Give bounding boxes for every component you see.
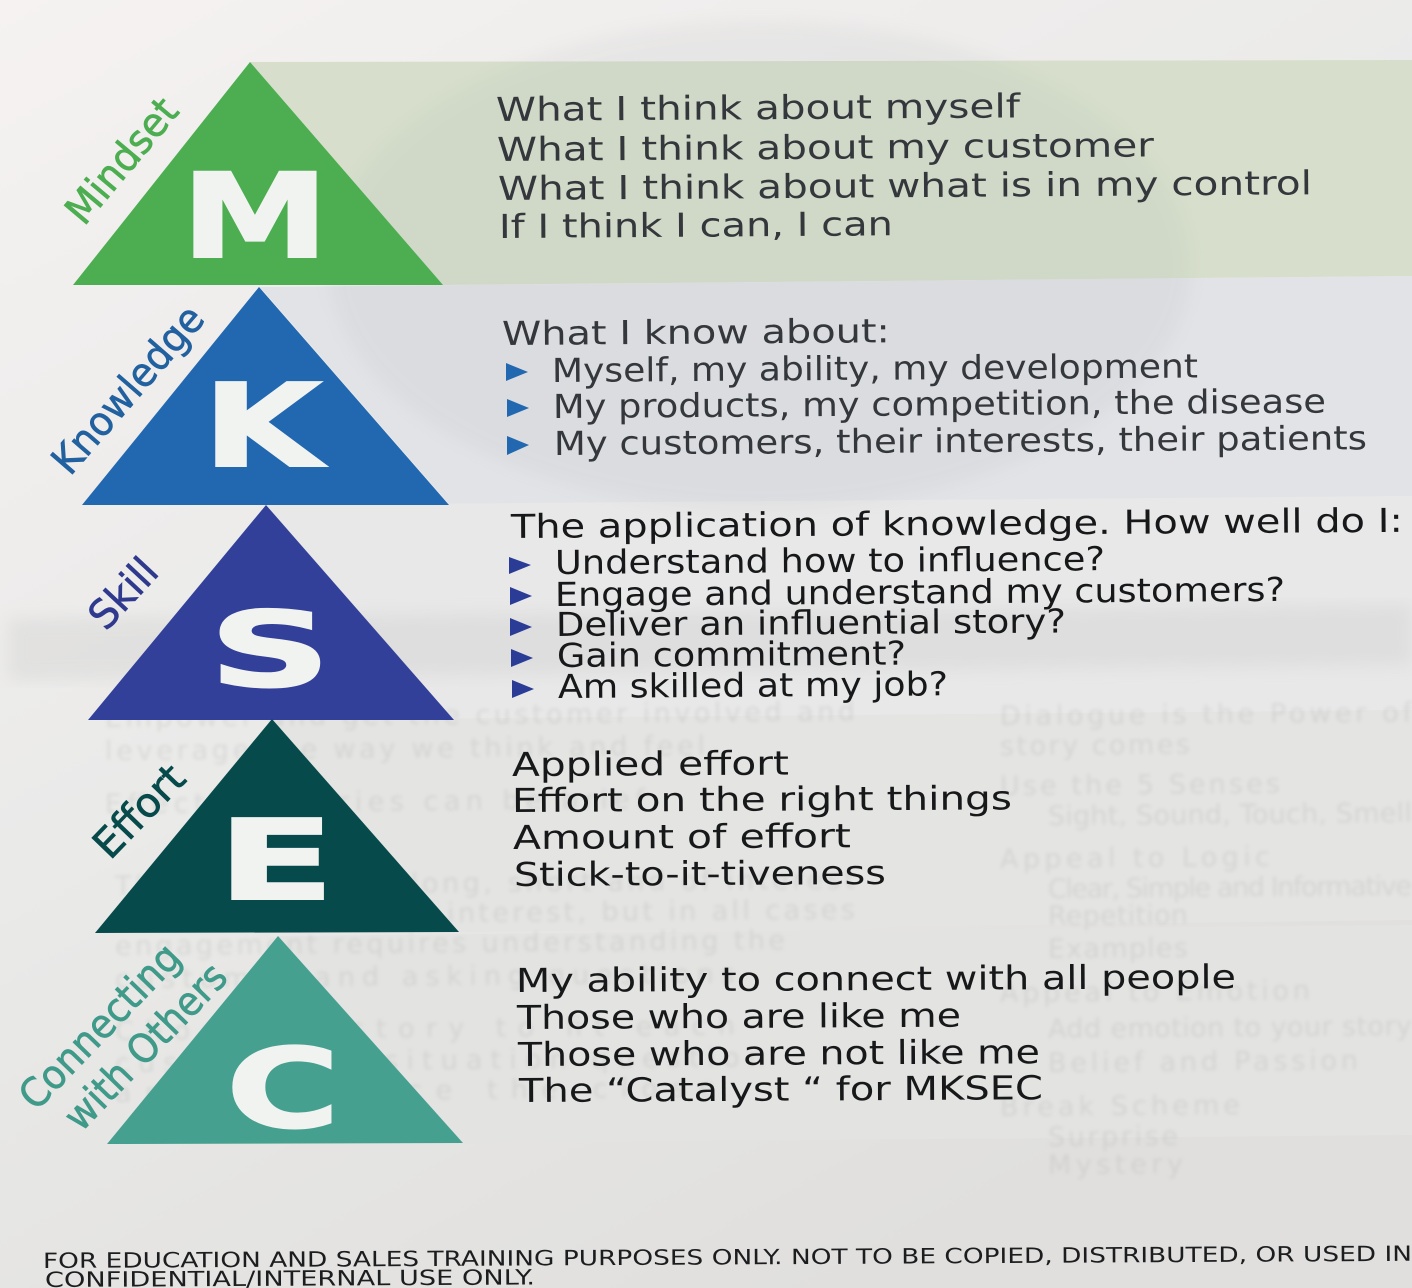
text: skill lines: Am skilled at my job?	[558, 664, 948, 706]
band: mindset background	[250, 60, 1412, 285]
show-through text: Surprise	[1048, 1121, 1178, 1153]
show-through text: Use the 5 Senses	[1000, 769, 1280, 802]
letter S: S	[209, 589, 331, 711]
show-through text: Appeal to Emotion	[1000, 975, 1310, 1009]
show-through text: The story can be long, short and of interest	[114, 865, 855, 902]
text: effort lines: Effort on the right things	[512, 778, 1012, 820]
show-through text: customer and asking questions	[115, 959, 735, 995]
label Skill: Skill	[80, 549, 168, 639]
text: skill lines: Engage and understand my customers?	[555, 570, 1285, 614]
text: mindset lines	[496, 86, 1312, 246]
show-through text: Belief and Passion	[1048, 1045, 1358, 1079]
text: skill lines: Understand how to influence?	[555, 539, 1105, 582]
show-through text: Add emotion to your story	[1048, 1011, 1412, 1045]
label Effort: Effort	[84, 755, 195, 868]
bullets	[509, 557, 534, 698]
text: knowledge lines	[502, 311, 1367, 463]
band: skill background	[265, 496, 1412, 720]
show-through text: customer or situation question	[115, 1042, 765, 1079]
text: effort lines: Stick-to-it-tiveness	[514, 853, 886, 894]
show-through text: Dialogue is the Power of	[1000, 697, 1412, 732]
show-through text: Effective stories can be brief	[105, 784, 647, 820]
label Connecting with Others: with Others	[55, 954, 237, 1140]
bullets	[506, 363, 529, 455]
panel: Effort	[84, 719, 1012, 933]
show-through text: and reinforce the close	[115, 1073, 715, 1109]
text: knowledge lines: Myself, my ability, my development	[552, 346, 1198, 390]
text: connecting lines: My ability to connect with all people	[516, 957, 1236, 1000]
panel: Skill	[80, 501, 1403, 720]
show-through text: Repetition	[1048, 900, 1188, 932]
text: knowledge lines: My products, my competition, the disease	[553, 382, 1326, 426]
text: skill lines: The application of knowledge. How well do I:	[510, 501, 1403, 546]
triangle S	[88, 505, 454, 720]
text: effort lines: Applied effort	[512, 744, 789, 784]
show-through text: engagement requires understanding the	[115, 925, 785, 962]
band: effort background	[272, 710, 1412, 932]
show-through text: Examples	[1048, 933, 1188, 965]
show-through text: Sight, Sound, Touch, Smell	[1048, 798, 1412, 832]
show-through text: story comes	[1000, 729, 1190, 762]
panel: Connecting with Others	[10, 934, 1236, 1153]
panel: Mindset	[56, 62, 1312, 285]
text: skill lines: Gain commitment?	[557, 634, 906, 675]
show-through header bar	[8, 605, 1412, 680]
text: knowledge lines: My customers, their interests, their patients	[554, 418, 1367, 463]
text: skill lines: Deliver an influential story?	[556, 601, 1066, 644]
text: knowledge lines: What I know about:	[502, 311, 890, 353]
label Mindset: Mindset	[56, 89, 188, 233]
show-through text: leverage the way we think and feel	[105, 731, 705, 767]
text: mindset lines: If I think I can, I can	[499, 204, 893, 246]
text: connecting lines: The “Catalyst “ for MKSEC	[518, 1068, 1043, 1110]
panel: Knowledge	[43, 287, 1367, 505]
show-through text	[105, 696, 1412, 1181]
text: effort lines: Amount of effort	[513, 816, 851, 857]
text: mindset lines: What I think about myself	[496, 86, 1022, 129]
show-through text: Clear, Simple and Informative	[1048, 871, 1412, 905]
band: knowledge background	[260, 276, 1412, 505]
label Connecting with Others: Connecting	[10, 934, 190, 1119]
text: connecting lines: Those who are not like me	[517, 1032, 1040, 1074]
show-through text: customer's level of interest, but in all cases	[115, 895, 855, 932]
letter E: E	[217, 797, 335, 926]
text: effort lines	[512, 744, 1012, 894]
show-through text: Empower and get the customer involved and	[105, 696, 855, 734]
text: mindset lines: What I think about my customer	[497, 125, 1155, 169]
triangle E	[95, 719, 459, 933]
triangle M	[73, 62, 443, 285]
letter M: M	[181, 148, 329, 285]
footer text: FOR EDUCATION AND SALES TRAINING PURPOSES ONLY. NOT TO BE COPIED, DISTRIBUTED, OR USED IN	[43, 1242, 1412, 1273]
letter K: K	[202, 360, 327, 494]
label Knowledge: Knowledge	[43, 296, 214, 484]
show-through circle	[328, 20, 1192, 510]
text: skill lines	[510, 501, 1403, 706]
show-through text: Break Scheme	[1000, 1090, 1240, 1123]
text: connecting lines	[516, 957, 1236, 1110]
letter C: C	[226, 1025, 340, 1153]
text: mindset lines: What I think about what is in my control	[498, 163, 1312, 208]
triangle K	[82, 287, 449, 505]
triangle C	[107, 936, 463, 1144]
show-through text: Appeal to Logic	[1000, 842, 1270, 875]
show-through text: Mystery	[1048, 1149, 1183, 1181]
text: connecting lines: Those who are like me	[516, 996, 961, 1037]
footer text	[43, 1242, 1412, 1288]
show-through text: Choose a story to fit each	[115, 1011, 735, 1047]
band: connecting background	[278, 925, 1412, 1143]
